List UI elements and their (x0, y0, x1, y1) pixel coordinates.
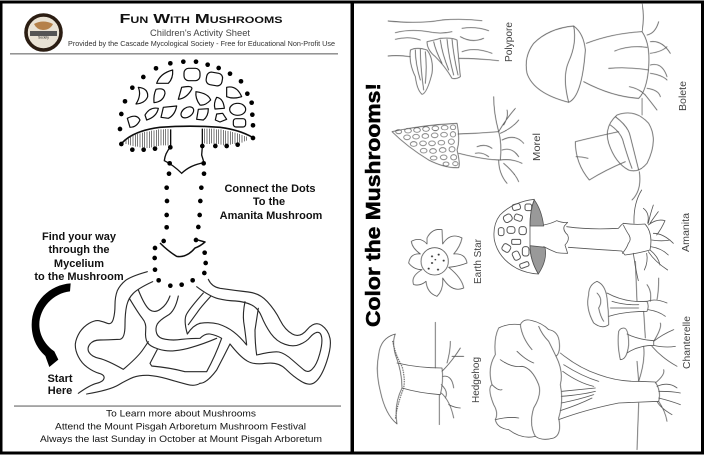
connect-the-dots amanita mushroom (118, 59, 255, 288)
cap patches (498, 203, 532, 269)
dots (118, 59, 255, 288)
label: Morel: Morel (532, 133, 543, 161)
stem base ring (160, 240, 205, 257)
start label: Start (47, 373, 73, 385)
polypore (388, 19, 499, 94)
maze instruction: Find your way (42, 231, 117, 243)
label: Chanterelle: Chanterelle (682, 316, 693, 369)
panel border left (1, 2, 352, 453)
chanterelle large (490, 320, 680, 450)
cap (494, 199, 538, 274)
gills (530, 200, 546, 274)
ground and roots (633, 190, 642, 281)
footer text: To Learn more about Mushrooms (106, 408, 256, 420)
maze instruction: Mycelium (54, 258, 104, 270)
connect the dots instruction: To the (253, 196, 285, 208)
panel: coloring page (352, 2, 702, 453)
arrow: curved to start (32, 283, 71, 367)
label: Bolete: Bolete (678, 81, 689, 111)
footer text (40, 408, 322, 445)
inner strand (197, 287, 322, 371)
maze instruction: to the Mushroom (34, 271, 124, 283)
bolete large (526, 3, 670, 115)
earth star (409, 229, 467, 296)
upper outer mycelium strand (200, 279, 330, 384)
connect the dots instruction: Connect the Dots (224, 183, 316, 195)
panel: activity sheet (1, 2, 352, 453)
middle strand (200, 302, 247, 345)
start label (47, 373, 73, 397)
morel (392, 97, 524, 183)
stem and volva (544, 221, 568, 253)
maze instruction: through the (48, 244, 110, 256)
heading: Color the Mushrooms! (363, 83, 385, 327)
subtitle: Children's Activity Sheet (150, 28, 251, 38)
bolete small (575, 113, 653, 200)
start label: Here (48, 385, 72, 397)
connect the dots instruction (220, 183, 323, 222)
provider line: Provided by the Cascade Mycological Society - Free for Educational Non-Profit Use (68, 39, 335, 48)
lower half drawings (377, 229, 680, 450)
cap spots (127, 68, 246, 127)
cap edge and gills (122, 126, 252, 173)
label: Hedgehog: Hedgehog (471, 357, 482, 403)
maze instruction (34, 231, 124, 283)
label: Amanita: Amanita (681, 213, 692, 252)
chanterelle small (588, 261, 677, 381)
drawings (377, 3, 680, 450)
logo: Cascade Mycological Society (26, 15, 61, 50)
title: Fun With Mushrooms (120, 11, 282, 26)
mycelium maze (75, 272, 330, 394)
panel border right (352, 2, 702, 453)
connect the dots instruction: Amanita Mushroom (220, 210, 323, 222)
footer text: Always the last Sunday in October at Mount Pisgah Arboretum (40, 434, 322, 445)
footer text: Attend the Mount Pisgah Arboretum Mushroom Festival (55, 422, 306, 432)
amanita (494, 190, 673, 281)
logo: Cascade Mycological Society: Society (38, 36, 49, 40)
hedgehog (377, 322, 464, 425)
label: Earth Star: Earth Star (473, 238, 484, 284)
label: Polypore: Polypore (504, 22, 515, 62)
